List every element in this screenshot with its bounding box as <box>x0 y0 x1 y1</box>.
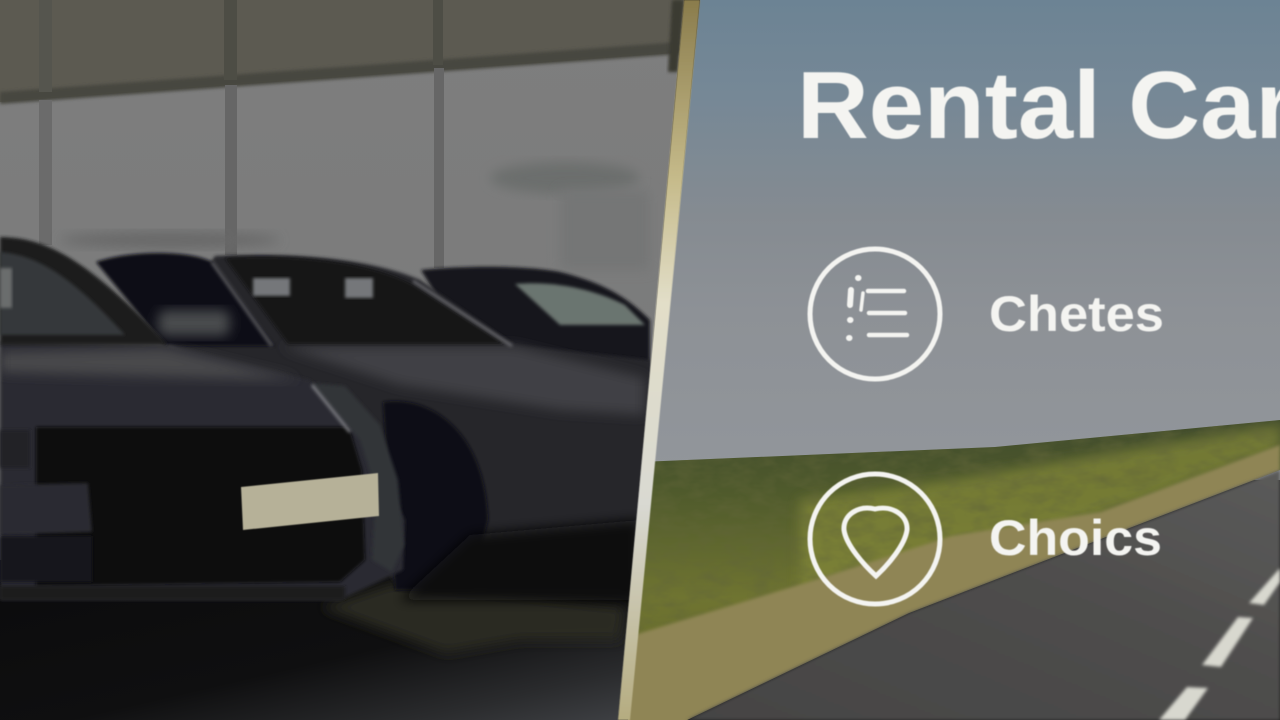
ceiling band <box>0 0 690 102</box>
label: Choics: Choics <box>989 510 1162 566</box>
front windshield <box>0 237 168 345</box>
icon: checklist <box>810 249 940 379</box>
gold divider <box>618 0 700 720</box>
second windshield <box>96 253 275 346</box>
front car body <box>0 342 405 600</box>
distant trees <box>490 162 640 194</box>
label: Chetes: Chetes <box>989 286 1164 342</box>
panel: showroom <box>0 0 690 720</box>
window mullions <box>39 0 444 268</box>
icon: shield <box>810 474 940 604</box>
back car <box>421 267 650 400</box>
headlight <box>311 383 404 572</box>
panel: road scene <box>610 0 1280 720</box>
road lane dashes <box>1159 568 1280 720</box>
left lamp and bumper <box>0 430 30 468</box>
middle car <box>160 255 650 590</box>
grille <box>36 427 365 586</box>
title: Rental Car <box>797 52 1280 159</box>
grass field <box>610 415 1280 720</box>
licence plate <box>241 473 379 530</box>
road <box>687 470 1280 720</box>
floor <box>0 560 690 720</box>
wheel arch <box>383 401 488 590</box>
